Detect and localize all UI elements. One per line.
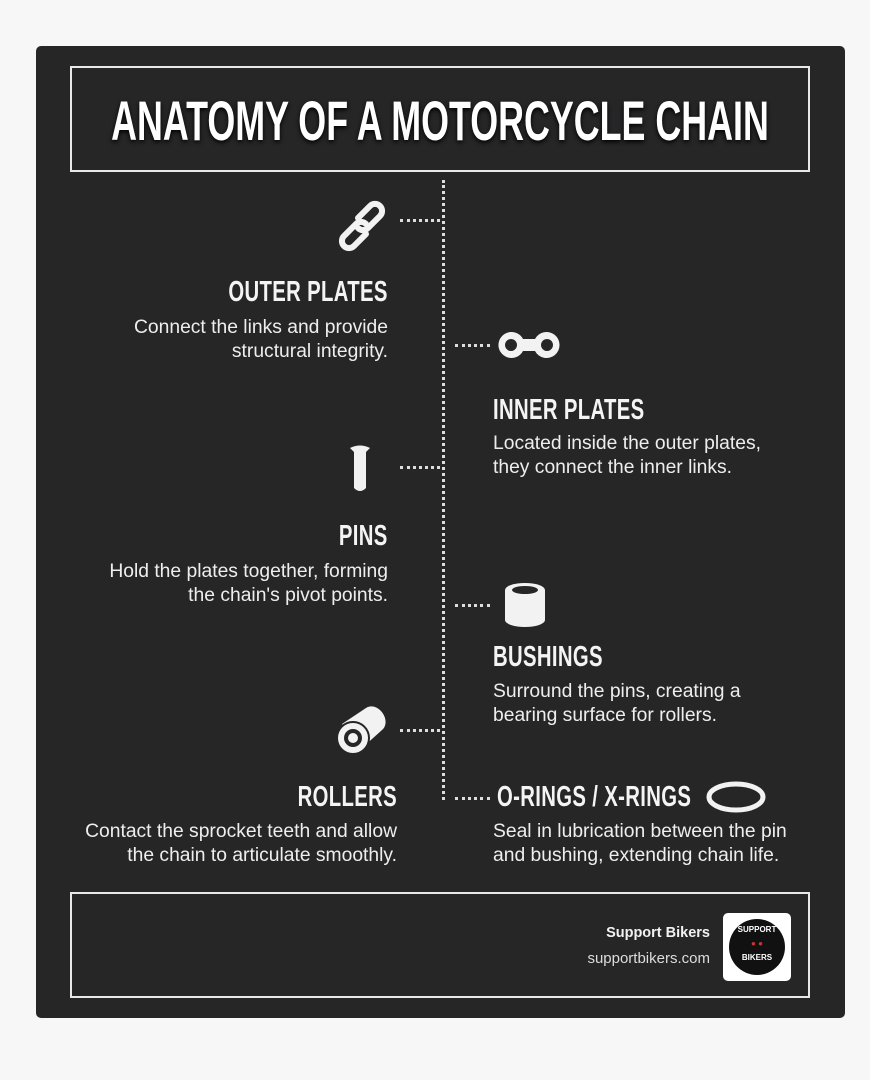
icon: o-ring xyxy=(706,782,766,812)
heading: rollers: ROLLERS xyxy=(298,781,397,813)
text: o-rings xyxy=(493,821,787,866)
icon: roller xyxy=(338,706,386,753)
footer box xyxy=(70,892,810,998)
icon: bushing xyxy=(505,583,545,627)
icon: inner plate xyxy=(498,332,560,358)
heading: outer plates: OUTER PLATES xyxy=(229,276,388,308)
text: o-rings: Seal in lubrication between the pin xyxy=(493,821,787,842)
logo: SUPPORT xyxy=(738,925,776,934)
text: bushings: bearing surface for rollers. xyxy=(493,705,717,726)
text: pins: Hold the plates together, forming xyxy=(109,561,388,582)
text: outer plates: structural integrity. xyxy=(232,341,388,362)
title: ANATOMY OF A MOTORCYCLE CHAIN xyxy=(111,89,769,152)
connector dots xyxy=(400,219,440,222)
logo xyxy=(723,913,791,981)
logo: BIKERS xyxy=(742,953,772,962)
icon: chain link xyxy=(338,200,386,252)
text: rollers: the chain to articulate smoothly. xyxy=(127,845,397,866)
text: o-rings: and bushing, extending chain life. xyxy=(493,845,779,866)
title box xyxy=(70,66,810,172)
heading: pins: PINS xyxy=(339,520,388,552)
brand name: Support Bikers xyxy=(606,925,710,941)
heading: o-rings: O-RINGS / X-RINGS xyxy=(497,781,691,813)
text: bushings: Surround the pins, creating a xyxy=(493,681,741,702)
logo: ● ● xyxy=(751,939,763,948)
icon: pin xyxy=(350,446,370,491)
text: inner plates: Located inside the outer plates, xyxy=(493,433,761,454)
text: outer plates xyxy=(134,317,388,362)
text: pins xyxy=(109,561,388,606)
heading: bushings: BUSHINGS xyxy=(493,641,603,673)
text: rollers xyxy=(85,821,398,866)
text: pins: the chain's pivot points. xyxy=(188,585,388,606)
heading: inner plates: INNER PLATES xyxy=(493,394,645,426)
text: rollers: Contact the sprocket teeth and allow xyxy=(85,821,397,842)
brand url: supportbikers.com xyxy=(587,950,710,967)
text: bushings xyxy=(493,681,741,726)
text: inner plates xyxy=(493,433,761,478)
text: inner plates: they connect the inner links. xyxy=(493,457,732,478)
text: outer plates: Connect the links and provide xyxy=(134,317,388,338)
dotted vertical line xyxy=(442,180,445,800)
